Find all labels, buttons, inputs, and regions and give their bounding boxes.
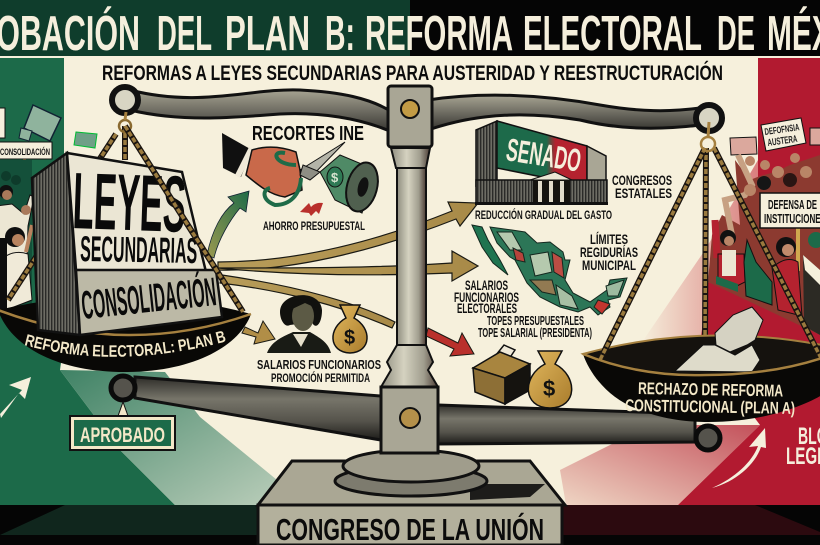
text: topes: TOPES PRESUPUESTALES — [487, 314, 584, 328]
arrow: cream right — [712, 428, 766, 488]
icon: senate building — [475, 121, 608, 205]
text: límites regidurías: LÍMITES — [590, 231, 628, 247]
block: leyes secundarias: SECUNDARIAS — [80, 228, 198, 271]
sign: defensa de instituciones — [760, 193, 820, 228]
sign: consolidación: CONSOLIDACIÓN — [0, 146, 50, 158]
text: congresos estatales: CONGRESOS — [612, 172, 672, 188]
text: salarios funcionarios electorales: FUNCIONARIOS — [454, 289, 519, 305]
left pan chains — [8, 112, 131, 300]
arrow: small gold to officials — [242, 321, 275, 344]
aprobado tag — [70, 402, 175, 450]
text: límites regidurías: REGIDURÍAS — [580, 244, 638, 260]
central column — [335, 86, 487, 496]
pan label: REFORMA ELECTORAL: PLAN B — [24, 331, 226, 357]
text: salarios funcionarios electorales — [454, 277, 519, 316]
right pan center chain and ring — [705, 148, 706, 342]
text: salarios funcionarios electorales: ELECTORALES — [457, 300, 517, 316]
text: salarios funcionarios electorales: SALARIOS — [465, 277, 508, 293]
sign: consolidación — [0, 142, 52, 159]
icon: hand with scissors cutting money — [222, 133, 383, 215]
text: topes — [478, 314, 592, 340]
balance: upper beam — [112, 87, 722, 132]
block: leyes secundarias — [32, 153, 222, 335]
map of Mexico — [472, 225, 627, 315]
text: salarios funcionarios promoción: PROMOCIÓN PERMITIDA — [271, 372, 370, 385]
arrow: cream left — [0, 377, 31, 418]
text: bloque legislativo — [786, 423, 820, 470]
icon: money bag left: $ — [344, 327, 355, 349]
icon: ballot box — [473, 345, 530, 404]
text: CONSOLIDACIÓN — [79, 268, 218, 328]
icon: cracked rock — [675, 307, 763, 372]
background: red side — [560, 56, 820, 505]
right pan outer chains — [596, 122, 820, 368]
block: leyes secundarias: LEYES — [71, 156, 187, 249]
title band: DE — [717, 7, 755, 61]
icon: woman official — [267, 295, 331, 353]
right crowd with signs: AUSTERA — [767, 134, 798, 149]
balance: lower beam — [111, 376, 720, 450]
icon: money bag right — [528, 351, 572, 408]
text: congresos estatales — [612, 172, 672, 201]
title band: PLAN — [225, 7, 310, 61]
icon: money bag right: $ — [543, 376, 555, 401]
pedestal: congreso de la unión — [258, 461, 565, 545]
icon: money bag left — [333, 305, 367, 353]
right pan front wall — [583, 354, 820, 422]
left crowd with signs — [0, 105, 97, 310]
icon: senate building: SENADO — [504, 131, 584, 179]
background: green side — [0, 56, 277, 505]
pan label — [625, 379, 795, 418]
right pan interior — [583, 335, 820, 375]
right crowd with signs: DEFOFNSIA — [764, 122, 800, 138]
arrows: gold branches from left pan — [218, 202, 478, 328]
title band: DEL — [157, 7, 212, 61]
arrow: red curved savings — [300, 203, 323, 216]
front chain over block — [125, 126, 243, 312]
arrow: red to ballot box — [426, 328, 474, 356]
right crowd with signs — [708, 118, 820, 335]
text: topes: TOPE SALARIAL (PRESIDENTA) — [478, 326, 592, 340]
text: reducción gradual: REDUCCIÓN GRADUAL DEL GASTO — [475, 209, 612, 222]
title band — [0, 0, 820, 61]
aprobado tag: APROBADO — [80, 424, 165, 447]
left pan — [0, 302, 252, 372]
text: recortes ine: RECORTES INE — [252, 123, 364, 145]
bottom black band — [0, 505, 820, 545]
title band: REFORMA — [365, 7, 513, 61]
money roll: $ — [331, 170, 339, 185]
text: congresos estatales: ESTATALES — [615, 185, 672, 201]
money roll — [320, 155, 383, 215]
title band: B: — [325, 7, 355, 61]
arrow: green rising — [207, 191, 249, 258]
text: límites regidurías — [580, 231, 638, 273]
text: salarios funcionarios promoción: SALARIOS FUNCIONARIOS — [257, 357, 381, 372]
title band: ELECTORAL — [523, 7, 702, 61]
text: salarios funcionarios promoción — [257, 357, 381, 385]
text: límites regidurías: MUNICIPAL — [582, 257, 636, 273]
text: ahorro presupuestal: AHORRO PRESUPUESTAL — [263, 221, 365, 233]
